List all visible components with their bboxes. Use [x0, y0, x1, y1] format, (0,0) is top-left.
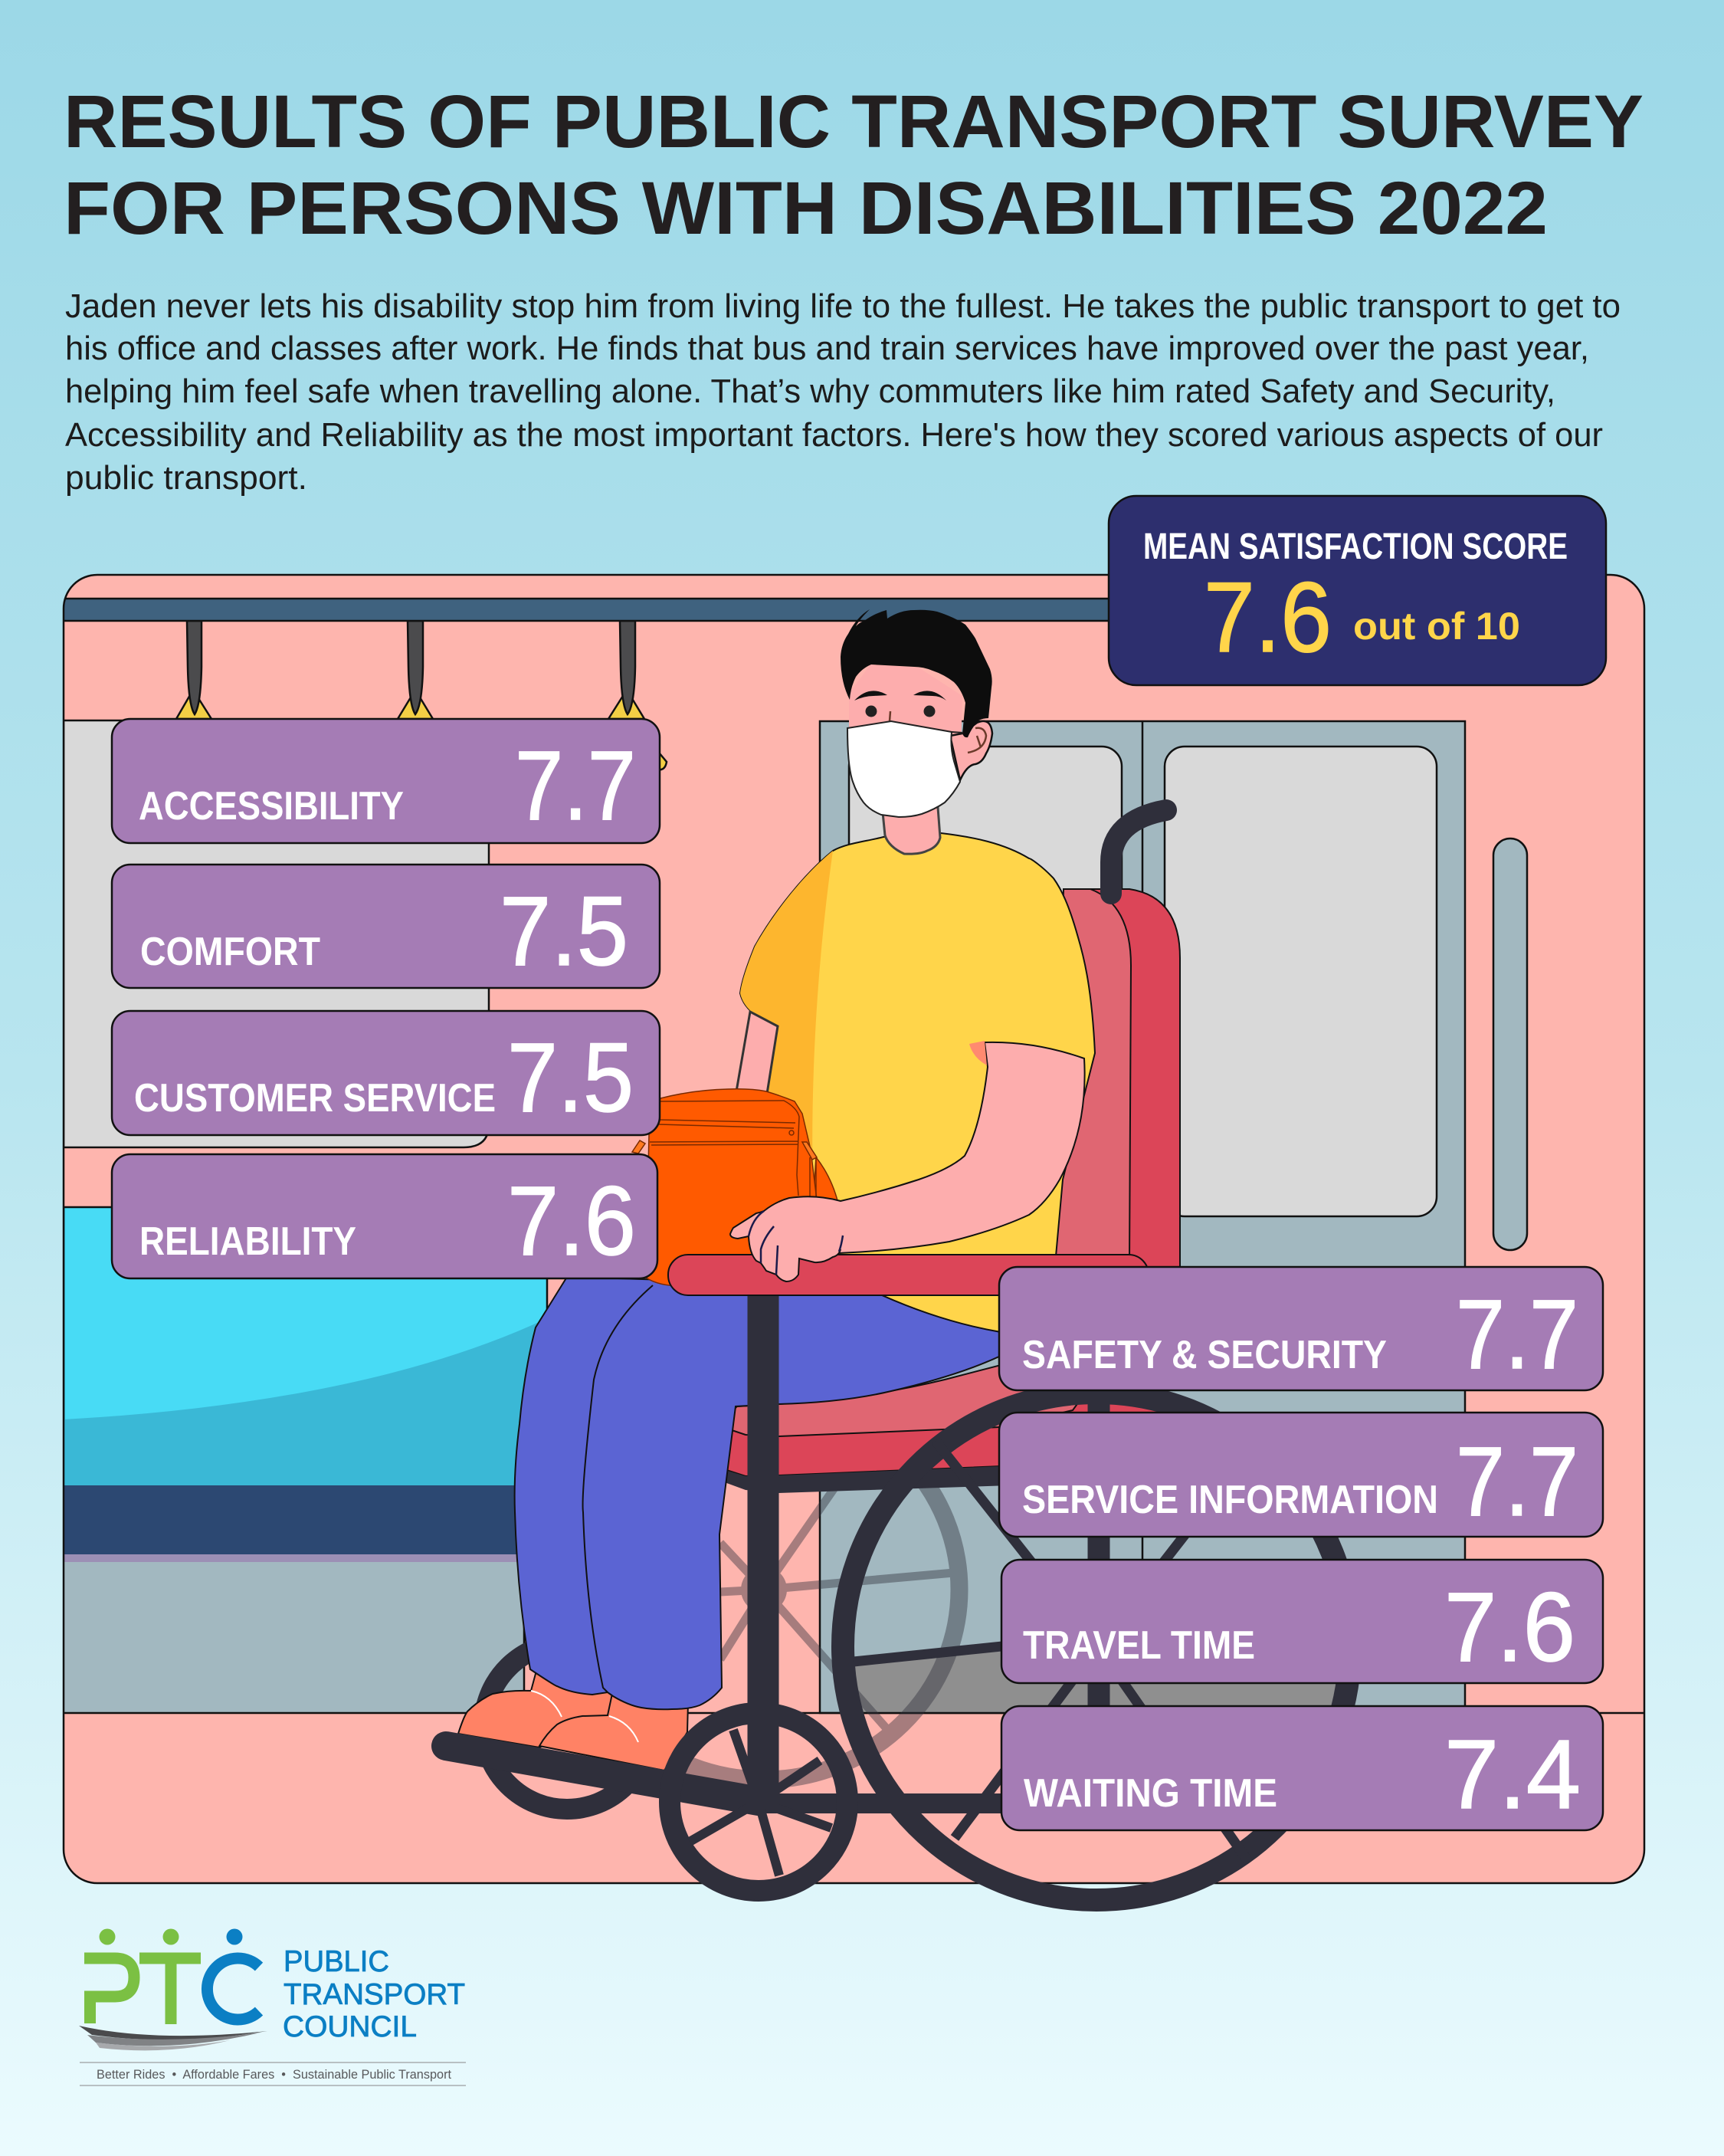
mean satisfaction score box: 7.6 — [1204, 561, 1332, 673]
logo tagline: Better Rides • Affordable Fares • Sustainable Public Transport — [97, 2067, 451, 2082]
footrest — [446, 1746, 1149, 1803]
logo wordmark — [283, 1945, 465, 2043]
overhead rail — [61, 599, 1134, 621]
card: travel time — [1001, 1560, 1603, 1683]
big wheel — [843, 1393, 1350, 1900]
card: service information: SERVICE INFORMATION — [1022, 1478, 1438, 1522]
intro paragraph: public transport. — [65, 459, 307, 497]
logo wordmark: PUBLIC — [284, 1945, 389, 1978]
seat cushion — [724, 1364, 1165, 1476]
logo tagline — [80, 2062, 466, 2085]
floor — [64, 1712, 1644, 1714]
shoes — [458, 1671, 688, 1770]
rear small wheel — [484, 1643, 650, 1809]
logo wordmark: COUNCIL — [283, 2010, 417, 2043]
card: safety and security: 7.7 — [1456, 1280, 1578, 1390]
logo mark — [79, 1928, 267, 2050]
card: reliability: 7.6 — [507, 1167, 636, 1276]
grab pole — [1493, 838, 1527, 1250]
wheelchair push handle — [1111, 810, 1166, 894]
card: waiting time: WAITING TIME — [1024, 1771, 1277, 1816]
bench seat — [64, 1207, 547, 1713]
card: safety and security — [999, 1267, 1603, 1390]
title: FOR PERSONS WITH DISABILITIES 2022 — [64, 166, 1548, 250]
face mask — [847, 721, 960, 817]
card: accessibility: 7.7 — [515, 731, 636, 841]
intro paragraph — [65, 287, 1621, 497]
card: comfort — [112, 865, 660, 988]
card: waiting time — [1001, 1706, 1603, 1830]
intro paragraph: helping him feel safe when travelling alone. That’s why commuters like him rated Safety and Security, — [65, 372, 1555, 410]
mean satisfaction score box: MEAN SATISFACTION SCORE — [1143, 527, 1568, 567]
seat frame bar — [723, 1460, 1149, 1493]
card: reliability — [112, 1154, 657, 1278]
hanging straps — [176, 621, 667, 770]
wheelchair frame post — [748, 1295, 778, 1803]
mean satisfaction score box: out of 10 — [1353, 605, 1520, 648]
card: customer service: CUSTOMER SERVICE — [134, 1076, 496, 1121]
head — [841, 609, 992, 817]
eyes and brows — [854, 691, 946, 721]
card: waiting time: 7.4 — [1444, 1720, 1581, 1829]
card: safety and security: SAFETY & SECURITY — [1022, 1333, 1387, 1377]
illustration: man in wheelchair — [446, 609, 1350, 1900]
card: accessibility — [112, 719, 660, 843]
title — [64, 80, 1644, 250]
mean satisfaction score box — [1109, 496, 1606, 685]
ear — [950, 721, 992, 780]
logo: public transport council — [79, 1928, 466, 2085]
neck — [883, 797, 940, 854]
trousers — [515, 1277, 1001, 1709]
card: service information: 7.7 — [1456, 1427, 1578, 1537]
near arm and hand — [730, 1041, 1085, 1281]
card: customer service — [112, 1011, 660, 1135]
card: service information — [999, 1413, 1603, 1537]
card: travel time: TRAVEL TIME — [1023, 1623, 1255, 1668]
front caster wheel — [670, 1713, 847, 1891]
orange bag — [632, 1089, 838, 1286]
intro paragraph: Accessibility and Reliability as the most important factors. Here's how they scored various aspects of our — [65, 416, 1603, 454]
intro paragraph: Jaden never lets his disability stop him from living life to the fullest. He takes the public transport to get to — [65, 287, 1621, 325]
grey window — [64, 720, 489, 1147]
door — [820, 721, 1465, 1713]
wheelchair backrest — [1055, 889, 1180, 1303]
rear ghost wheel — [569, 1400, 959, 1780]
card: travel time: 7.6 — [1444, 1573, 1575, 1682]
intro paragraph: his office and classes after work. He finds that bus and train services have improved over the past year, — [65, 330, 1589, 367]
card: accessibility: ACCESSIBILITY — [139, 784, 404, 829]
hair — [841, 609, 992, 737]
panel: train interior — [61, 575, 1644, 1883]
card: comfort: 7.5 — [500, 877, 628, 986]
card: customer service: 7.5 — [507, 1023, 634, 1133]
far arm — [736, 1012, 778, 1094]
card: comfort: COMFORT — [140, 930, 320, 974]
card: reliability: RELIABILITY — [139, 1219, 356, 1264]
t-shirt — [740, 833, 1095, 1332]
logo wordmark: TRANSPORT — [284, 1978, 465, 2011]
armrest — [668, 1255, 1149, 1295]
title: RESULTS OF PUBLIC TRANSPORT SURVEY — [64, 80, 1644, 163]
